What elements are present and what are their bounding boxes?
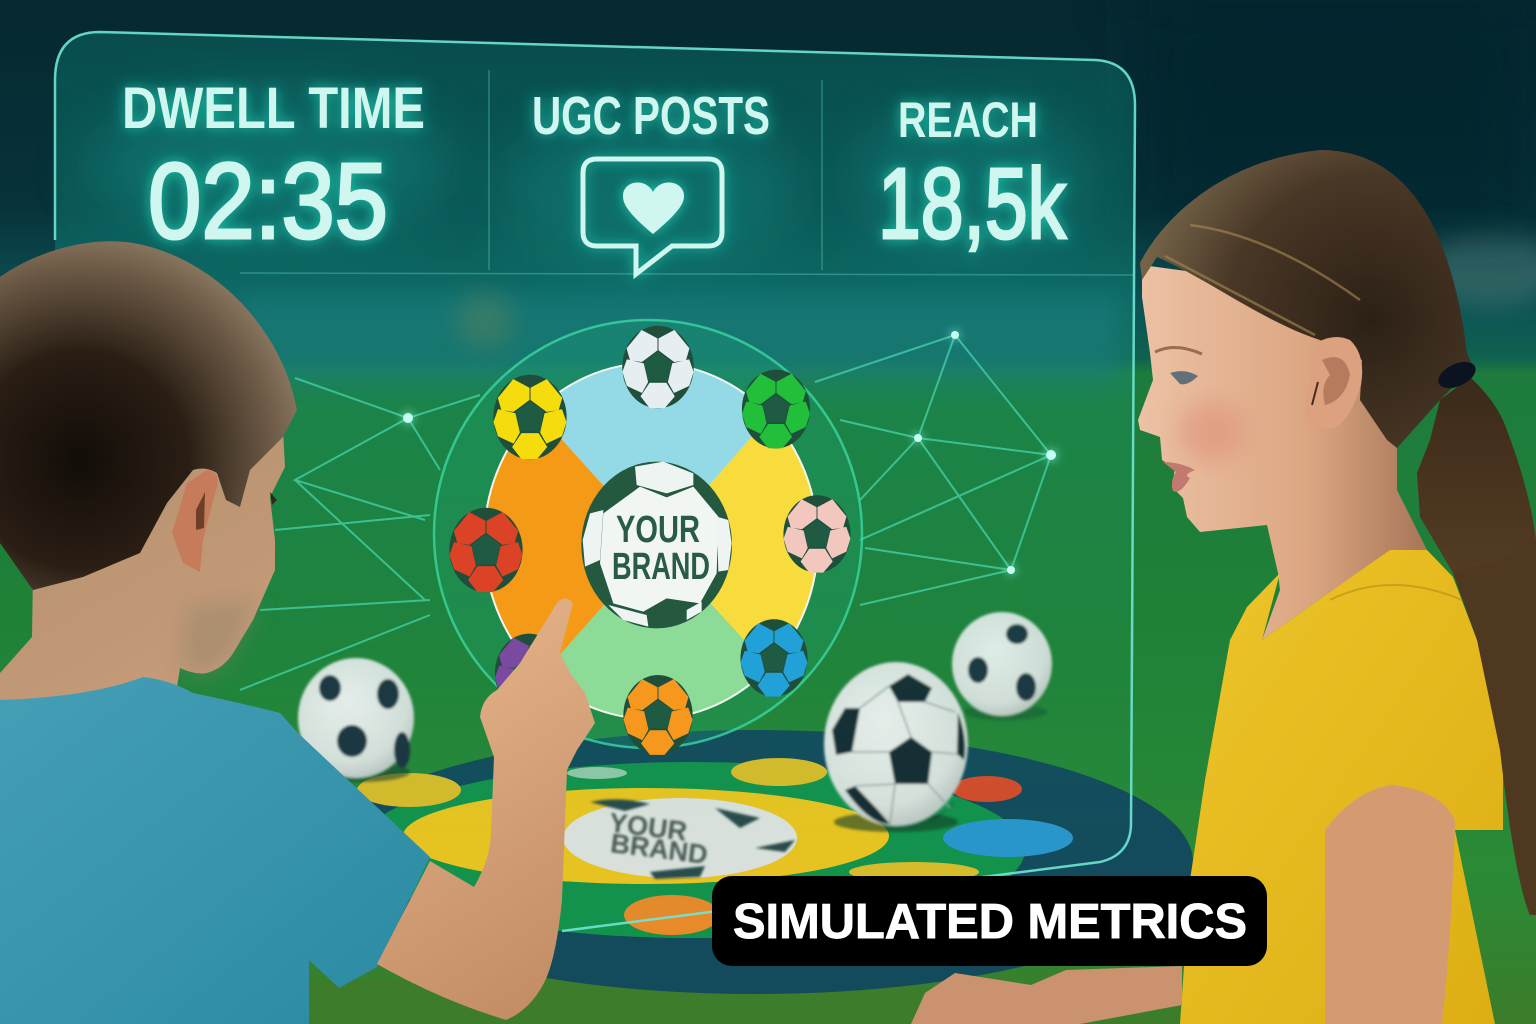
girl cheek [1178,402,1246,462]
football right [952,612,1052,720]
boy jaw shadow [180,600,258,673]
boy shirt [0,677,430,1024]
center ball with brand: BRAND [612,546,710,588]
girl sleeve seam [1330,585,1462,600]
metric: ugc posts [532,86,770,274]
metric: reach [878,92,1067,260]
metric: dwell time: 02:35 [148,140,388,261]
satellite balls [449,326,851,755]
boy arm and pointing hand [377,598,595,1020]
wheel sector: light blue [560,366,752,486]
glass metrics panel [55,32,1135,931]
boy eye lash [270,492,277,505]
girl ear [1305,337,1362,429]
metric: dwell time [122,76,425,261]
girl hair [1140,150,1473,448]
game mat on the grass [317,730,1193,994]
football centre [824,662,968,832]
girl [911,150,1536,1024]
brand wheel [434,320,862,755]
girl face and neck [1138,265,1427,640]
girl hair highlight [1165,225,1360,335]
boy neck and face [0,430,285,720]
girl lips [1163,462,1195,492]
icon: heart speech bubble [583,159,722,274]
metric: reach: 18,5k [878,148,1067,260]
metric: ugc posts: UGC POSTS [532,86,770,146]
wheel halo [434,320,862,748]
wheel sector: yellow [709,436,814,640]
mat brand text: YOUR [608,807,689,847]
network nodes [403,331,1056,574]
center ball with brand [581,462,732,628]
girl arm [1325,785,1455,1024]
girl forearm and hand [911,966,1182,1024]
wheel sectors [488,366,814,716]
wheel sector: orange [488,438,604,654]
grass footballs [298,612,1052,832]
football left [298,658,414,782]
metric: reach: REACH [898,92,1038,148]
girl shirt [1180,550,1503,1024]
wheel sector: light green [560,603,749,716]
boy [0,241,595,1024]
center ball with brand: YOUR [616,509,700,551]
metric: dwell time: DWELL TIME [122,76,425,141]
girl hair tie [1434,357,1480,393]
simulated metrics label [712,876,1267,966]
girl ponytail [1417,377,1536,915]
boy hair [0,241,297,590]
simulated metrics label: SIMULATED METRICS [733,895,1247,949]
girl ponytail lower [1453,540,1536,915]
network lines [240,335,1051,690]
girl eye and brow [1155,347,1202,384]
mat brand text: BRAND [609,828,709,870]
boy ear [172,470,218,572]
mat brand text [608,807,709,870]
